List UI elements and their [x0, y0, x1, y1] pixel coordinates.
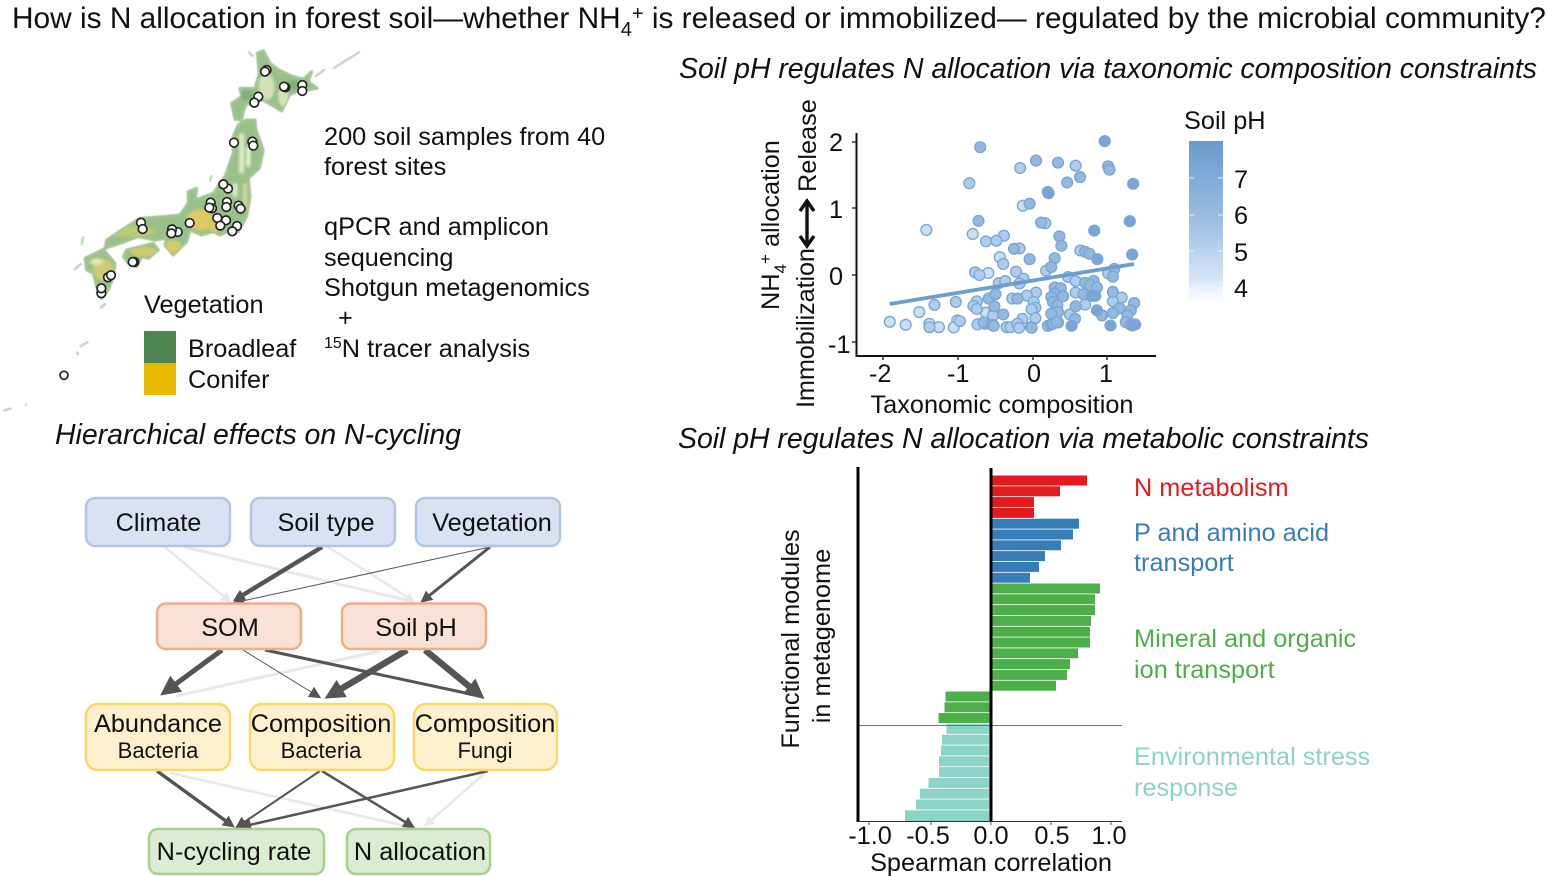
y axis title: NH4+ allocation: allocation — [757, 140, 785, 254]
category label: mineral and organic ion transport: Mineral and organic — [1134, 625, 1356, 653]
panel: site map of Japan — [3, 51, 360, 411]
methods text block: 15 — [324, 335, 342, 352]
title: + — [632, 3, 644, 25]
node: Composition Bacteria: Composition — [251, 710, 391, 738]
node: Composition Bacteria — [250, 704, 394, 770]
methods text block: + — [338, 304, 353, 332]
x tick labels: 1.0 — [1091, 822, 1127, 850]
node: Climate — [86, 498, 230, 546]
category label: P and amino acid transport: P and amino acid — [1134, 519, 1329, 547]
y axis title: NH4+ allocation: NH — [757, 273, 785, 310]
bars: environmental stress response — [905, 724, 991, 821]
x tick labels: 0.0 — [973, 822, 1009, 850]
x axis title: Taxonomic composition — [871, 391, 1133, 419]
bars: mineral and organic ion transport — [938, 584, 1100, 723]
node: N-cycling rate — [149, 829, 324, 874]
vegetation legend — [144, 291, 297, 395]
node: SOM — [157, 604, 301, 649]
x tick labels: -0.5 — [906, 822, 950, 850]
node: Composition Fungi: Fungi — [457, 738, 513, 763]
arrows between factors — [157, 547, 490, 827]
y axis title: Immobilization: Immobilization — [792, 248, 820, 408]
node: Soil pH — [342, 604, 486, 649]
vegetation legend: Broadleaf — [188, 335, 297, 363]
x tick labels: 0.5 — [1034, 822, 1070, 850]
methods text block: sequencing — [324, 244, 453, 272]
colour bar legend: 7 — [1234, 166, 1248, 194]
vegetation legend: Vegetation — [144, 291, 264, 319]
node: Soil pH: Soil pH — [375, 614, 457, 642]
node: Composition Bacteria: Bacteria — [281, 738, 362, 763]
map of Japan landmass — [3, 51, 360, 411]
heading: hierarchical effects: Hierarchical effects on N-cycling — [55, 419, 461, 451]
node: Climate: Climate — [116, 509, 201, 537]
axis tick labels: -1 — [947, 360, 970, 388]
axis tick labels: 1 — [1099, 360, 1113, 388]
axis tick labels — [828, 129, 1113, 388]
category label: mineral and organic ion transport: ion transport — [1134, 656, 1275, 684]
node: N allocation — [347, 829, 490, 874]
x tick labels — [848, 822, 1127, 850]
node: Soil type: Soil type — [277, 509, 375, 537]
node: Composition Fungi: Composition — [415, 710, 555, 738]
data points — [884, 136, 1141, 333]
methods text block — [324, 123, 605, 363]
axis tick labels: 1 — [829, 196, 843, 224]
axes — [852, 133, 1156, 360]
y axis title: Release: Release — [794, 99, 822, 192]
axis tick labels: -2 — [869, 360, 892, 388]
node: Soil type — [251, 498, 395, 546]
panel: path diagram — [86, 498, 560, 874]
methods text block: N tracer analysis — [342, 335, 530, 363]
sampling sites — [60, 66, 307, 379]
double arrow — [800, 201, 814, 246]
axis tick labels: 2 — [829, 129, 843, 157]
title: How is N allocation in forest soil—whether NH — [12, 2, 621, 35]
colour bar legend: 5 — [1234, 239, 1248, 267]
y axis title: NH4+ allocation: 4 — [771, 264, 790, 273]
axes and divider — [858, 467, 1122, 825]
panel: bar chart — [777, 467, 1370, 876]
node: Abundance Bacteria — [86, 704, 230, 770]
title: is released or immobilized— regulated by the microbial community? — [644, 2, 1546, 35]
axis tick labels: 0 — [829, 263, 843, 291]
axis tick labels: -1 — [828, 331, 850, 359]
bars: P and amino acid transport — [991, 519, 1079, 583]
methods text block: forest sites — [324, 153, 446, 181]
node: N allocation: N allocation — [354, 838, 486, 866]
heading: taxonomic composition: Soil pH regulates N allocation via taxonomic composition constraints — [679, 53, 1537, 85]
node: Abundance Bacteria: Abundance — [94, 710, 222, 738]
heading: metabolic constraints: Soil pH regulates N allocation via metabolic constraints — [678, 423, 1369, 455]
category label: environmental stress response: response — [1134, 774, 1238, 802]
node: Vegetation: Vegetation — [432, 509, 552, 537]
axis tick labels: 0 — [1027, 360, 1041, 388]
colour bar legend: 6 — [1234, 202, 1248, 230]
title: 4 — [621, 19, 632, 41]
regression line — [890, 264, 1134, 304]
node: Vegetation — [416, 498, 560, 546]
category label: P and amino acid transport: transport — [1134, 549, 1234, 577]
vegetation legend: Conifer — [188, 366, 270, 394]
node: Composition Fungi — [414, 704, 557, 770]
colour bar legend — [1184, 107, 1266, 303]
methods text block: Shotgun metagenomics — [324, 274, 590, 302]
category label: N metabolism: N metabolism — [1134, 474, 1289, 502]
y axis title: Functional modules — [777, 529, 805, 749]
category label: environmental stress response: Environmental stress — [1134, 743, 1370, 771]
methods text block: qPCR and amplicon — [324, 213, 549, 241]
y axis title: in metagenome — [808, 549, 836, 723]
node: N-cycling rate: N-cycling rate — [157, 838, 311, 866]
node: SOM: SOM — [201, 614, 259, 642]
methods text block: 200 soil samples from 40 — [324, 123, 605, 151]
bars: N metabolism — [991, 476, 1087, 518]
node: Abundance Bacteria: Bacteria — [118, 738, 199, 763]
x tick labels: -1.0 — [848, 822, 892, 850]
colour bar legend: 4 — [1234, 275, 1248, 303]
panel: scatter plot — [756, 99, 1266, 419]
y axis title: NH4+ allocation: + — [756, 254, 775, 264]
colour bar legend: Soil pH — [1184, 107, 1266, 135]
